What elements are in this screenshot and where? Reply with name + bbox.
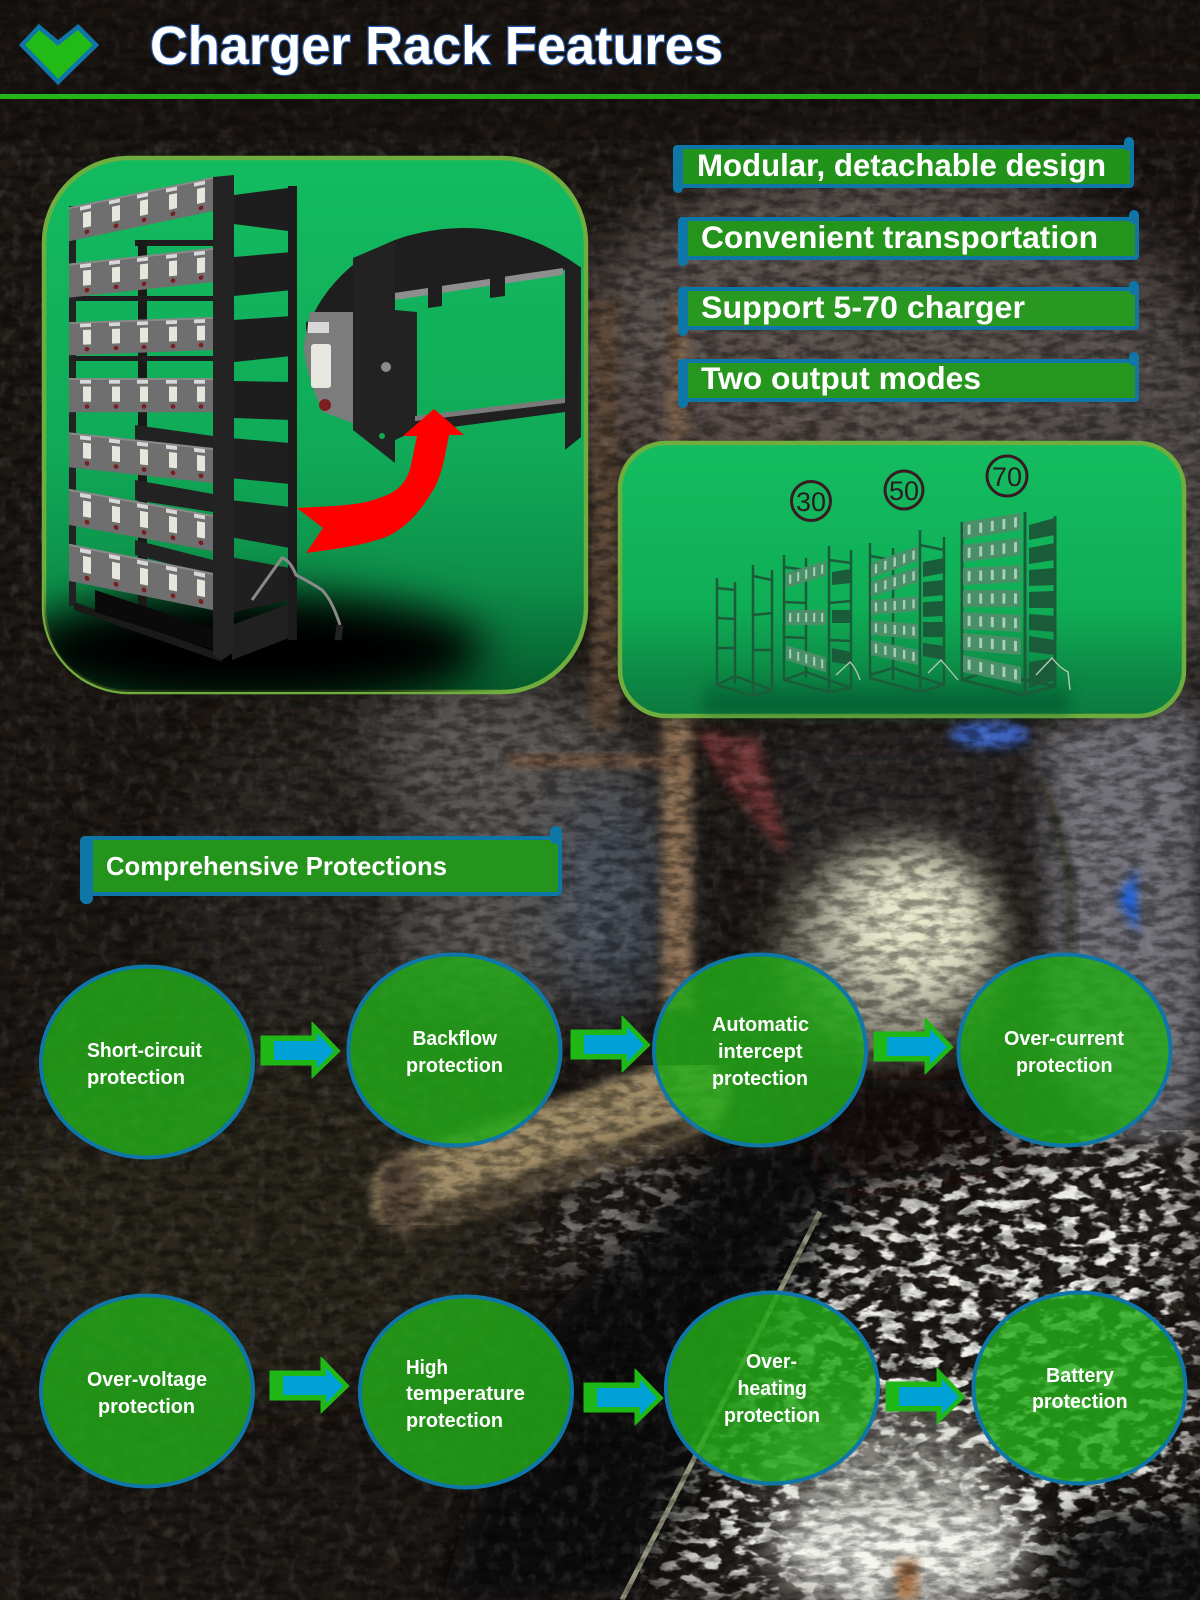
- node: Automatic intercept protection: [654, 954, 866, 1146]
- badge: 30: [792, 482, 830, 520]
- node: Backflow protection: [348, 954, 560, 1146]
- node: Over-voltage protection: Over-voltage: [87, 1368, 207, 1391]
- image: magnified rack joint: [304, 228, 581, 463]
- node: High temperature protection: High: [406, 1356, 448, 1379]
- header divider line: [0, 94, 1200, 99]
- node: Automatic intercept protection: intercept: [718, 1040, 803, 1063]
- node: Battery protection: protection: [1032, 1390, 1128, 1413]
- node: Over-voltage protection: protection: [98, 1395, 195, 1418]
- banner: Modular, detachable design: Modular, detachable design: [697, 147, 1106, 183]
- node: High temperature protection: [360, 1296, 572, 1488]
- arrow: step 2: [571, 1016, 650, 1072]
- arrow: step 5: [270, 1357, 349, 1413]
- arrow: step 7: [886, 1368, 965, 1424]
- node: Battery protection: [974, 1292, 1186, 1484]
- arrow: red curved: [297, 409, 464, 553]
- node: Backflow protection: protection: [406, 1054, 503, 1077]
- panel: modular rack detail: [15, 158, 586, 708]
- node: Over-current protection: protection: [1016, 1054, 1112, 1077]
- rack: 30 chargers: [784, 546, 860, 692]
- node: Over-current protection: Over-current: [1004, 1027, 1124, 1050]
- node: Over-heating protection: heating: [738, 1377, 807, 1400]
- badge: 70: 70: [992, 462, 1022, 492]
- node: Over-current protection: [958, 954, 1170, 1146]
- node: Short-circuit protection: Short-circuit: [87, 1039, 202, 1062]
- title: Charger Rack Features: [150, 16, 723, 76]
- panel: rack capacity options: [620, 443, 1184, 716]
- header: chevron icon: [22, 27, 96, 82]
- badge: 70: [987, 456, 1027, 496]
- banner: Modular, detachable design: [673, 137, 1134, 193]
- badge: 50: [885, 471, 923, 509]
- banner: Convenient transportation: Convenient transportation: [701, 219, 1098, 255]
- arrow: step 1: [261, 1022, 340, 1078]
- node: Short-circuit protection: [41, 966, 253, 1158]
- arrow: step 3: [874, 1018, 953, 1074]
- badge: 30: 30: [796, 487, 826, 517]
- image: charger rack: [69, 175, 340, 662]
- rack: 50 chargers: [870, 530, 958, 692]
- node: Short-circuit protection: protection: [87, 1066, 185, 1089]
- banner: Support 5-70 charger: [678, 281, 1139, 336]
- banner: Two output modes: [678, 352, 1139, 408]
- node: Over-heating protection: [666, 1292, 878, 1484]
- rack: 70 chargers: [962, 512, 1070, 695]
- node: Backflow protection: Backflow: [412, 1027, 497, 1050]
- node: High temperature protection: protection: [406, 1409, 503, 1432]
- rack: empty frame: [717, 565, 772, 696]
- node: Automatic intercept protection: protection: [712, 1067, 808, 1090]
- heading banner: Comprehensive Protections: Comprehensive Protections: [106, 851, 447, 881]
- badge: 50: 50: [889, 476, 919, 506]
- node: High temperature protection: temperature: [406, 1382, 525, 1405]
- floor shadow: [15, 592, 485, 708]
- node: Over-heating protection: Over-: [746, 1350, 797, 1373]
- arrow: step 6: [584, 1369, 663, 1425]
- node: Over-heating protection: protection: [724, 1404, 820, 1427]
- node: Automatic intercept protection: Automatic: [712, 1013, 809, 1036]
- heading banner: Comprehensive Protections: [80, 826, 562, 904]
- node: Over-voltage protection: [41, 1296, 253, 1486]
- banner: Convenient transportation: [678, 210, 1139, 266]
- banner: Two output modes: Two output modes: [701, 360, 981, 396]
- banner: Support 5-70 charger: Support 5-70 charger: [701, 289, 1025, 325]
- node: Battery protection: Battery: [1046, 1364, 1115, 1387]
